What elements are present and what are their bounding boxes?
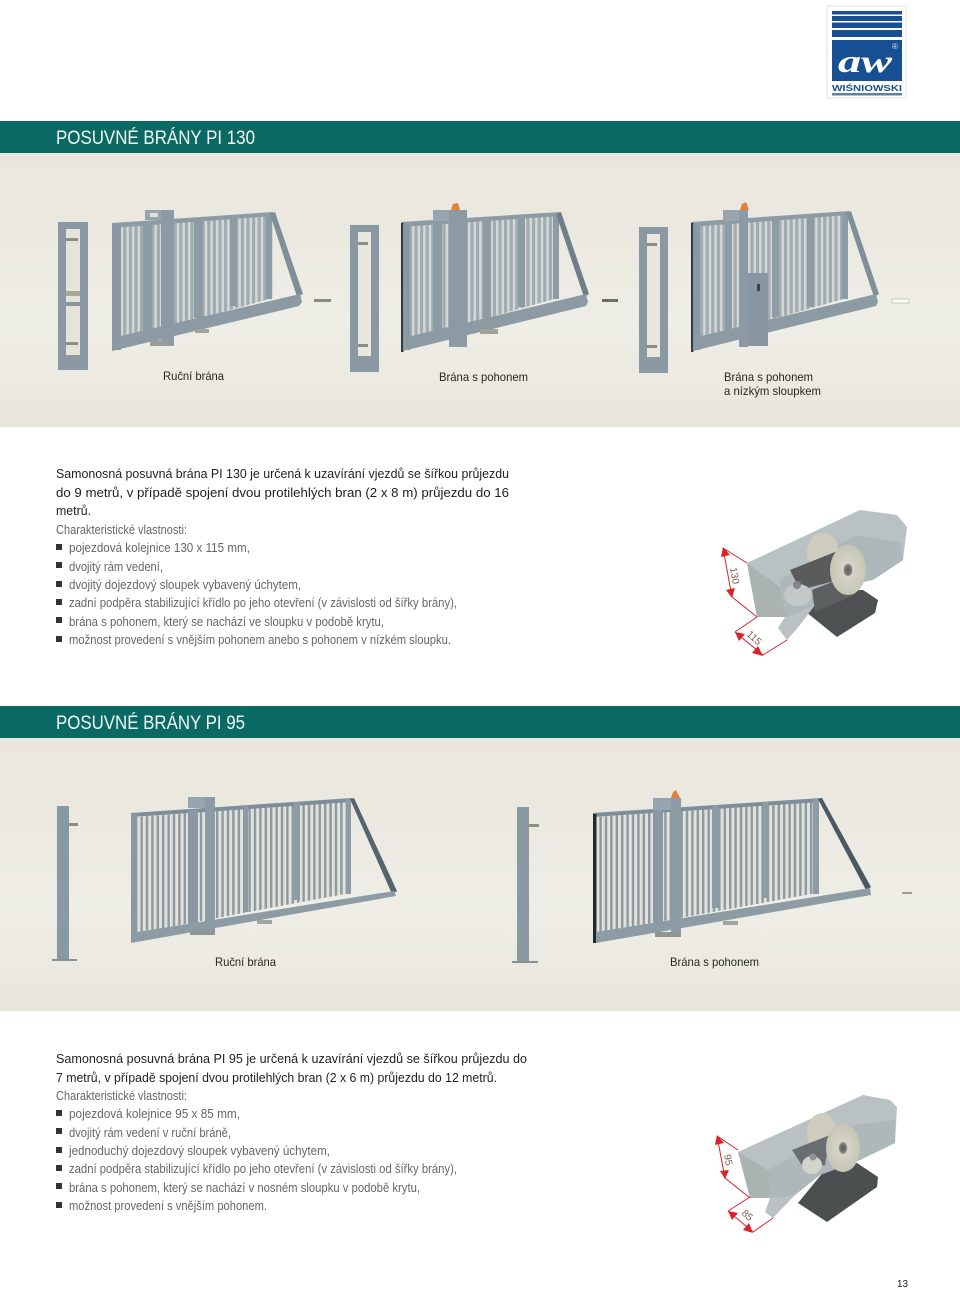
icon: rail and carriage 95 x 85: 85 [739, 1208, 755, 1224]
logo: Wiśniowski: WIŚNIOWSKI [832, 82, 902, 93]
icon: rail and carriage 95 x 85: 95 [721, 1154, 734, 1167]
gate illustration: manual gate [58, 210, 331, 370]
text block: PI 130 description: možnost provedení s vnějším pohonem anebo s pohonem v nízkém sloupku. [69, 632, 451, 647]
caption: manual gate PI 95: Ruční brána [215, 955, 276, 969]
text block: PI 130 description: brána s pohonem, který se nachází ve sloupku v podobě krytu, [69, 614, 384, 629]
section header: PI 130 [0, 121, 960, 153]
logo: Wiśniowski: aw [838, 43, 893, 79]
panel: PI 95 gates [0, 738, 960, 1011]
text block: PI 95 description: jednoduchý dojezdový sloupek vybavený úchytem, [68, 1143, 330, 1158]
text block: PI 130 description: pojezdová kolejnice 130 x 115 mm, [69, 540, 250, 555]
caption: gate with drive: Brána s pohonem [439, 370, 528, 384]
caption: gate with drive and low post: a nízkým sloupkem [724, 384, 821, 398]
section header: PI 95 [0, 706, 960, 738]
logo: Wiśniowski [827, 6, 906, 98]
text block: PI 95 description: Samonosná posuvná brána PI 95 je určená k uzavírání vjezdů se šířkou průjezdu do [56, 1051, 527, 1066]
text block: PI 130 description: dvojitý rám vedení, [69, 559, 163, 574]
icon: rail and carriage 130 x 115: 115 [744, 629, 764, 648]
gate illustration: gate with drive and low post [639, 202, 909, 373]
text block: PI 95 description: Charakteristické vlastnosti: [56, 1088, 187, 1103]
text block: PI 95 description: možnost provedení s vnějším pohonem. [69, 1198, 267, 1213]
text block: PI 130 description: Samonosná posuvná brána PI 130 je určená k uzavírání vjezdů se šířkou průjezdu [56, 466, 509, 481]
dimension lines [723, 548, 787, 655]
text block: PI 95 description: dvojitý rám vedení v ruční bráně, [69, 1125, 231, 1140]
text block: PI 95 description: 7 metrů, v případě spojení dvou protilehlých bran (2 x 6 m) průjezdu do 12 metrů. [56, 1070, 497, 1085]
text block: PI 95 description [56, 1051, 527, 1213]
section header: PI 95: POSUVNÉ BRÁNY PI 95 [56, 713, 245, 734]
mounting plate [806, 590, 878, 637]
gate illustration: manual gate PI 95 [52, 797, 397, 961]
section header: PI 130: POSUVNÉ BRÁNY PI 130 [56, 128, 255, 149]
caption: gate with drive and low post [724, 370, 821, 398]
text block: PI 130 description [56, 466, 509, 647]
icon: rail and carriage 130 x 115: 130 [727, 567, 741, 585]
dimension lines [717, 1136, 773, 1232]
icon: rail and carriage 95 x 85 [715, 1095, 897, 1233]
icon: rail and carriage 130 x 115 [721, 510, 907, 656]
text block: PI 130 description: do 9 metrů, v případě spojení dvou protilehlých bran (2 x 8 m) průjezdu do 16 [56, 485, 509, 500]
caption: manual gate: Ruční brána [163, 369, 224, 383]
panel: PI 130 gates [0, 153, 960, 427]
caption: gate with drive PI 95: Brána s pohonem [670, 955, 759, 969]
gate illustration: gate with drive PI 95 [512, 790, 912, 963]
mounting plate [798, 1163, 878, 1222]
text block: PI 130 description: metrů. [56, 503, 91, 518]
caption: gate with drive and low post: Brána s pohonem [724, 370, 813, 384]
text block: PI 95 description: zadní podpěra stabilizující křídlo po jeho otevření (v závislosti od šířky brány), [69, 1161, 457, 1176]
text block: PI 130 description: zadní podpěra stabilizující křídlo po jeho otevření (v závislosti od šířky brány), [69, 595, 457, 610]
text block: PI 95 description: brána s pohonem, který se nachází v nosném sloupku v podobě krytu, [69, 1180, 420, 1195]
logo: Wiśniowski: ® [892, 42, 898, 51]
text block: PI 95 description: pojezdová kolejnice 95 x 85 mm, [69, 1106, 240, 1121]
gate illustration: gate with drive [350, 203, 618, 372]
text block: PI 130 description: dvojitý dojezdový sloupek vybavený úchytem, [69, 577, 301, 592]
text block: PI 130 description: Charakteristické vlastnosti: [56, 522, 187, 537]
